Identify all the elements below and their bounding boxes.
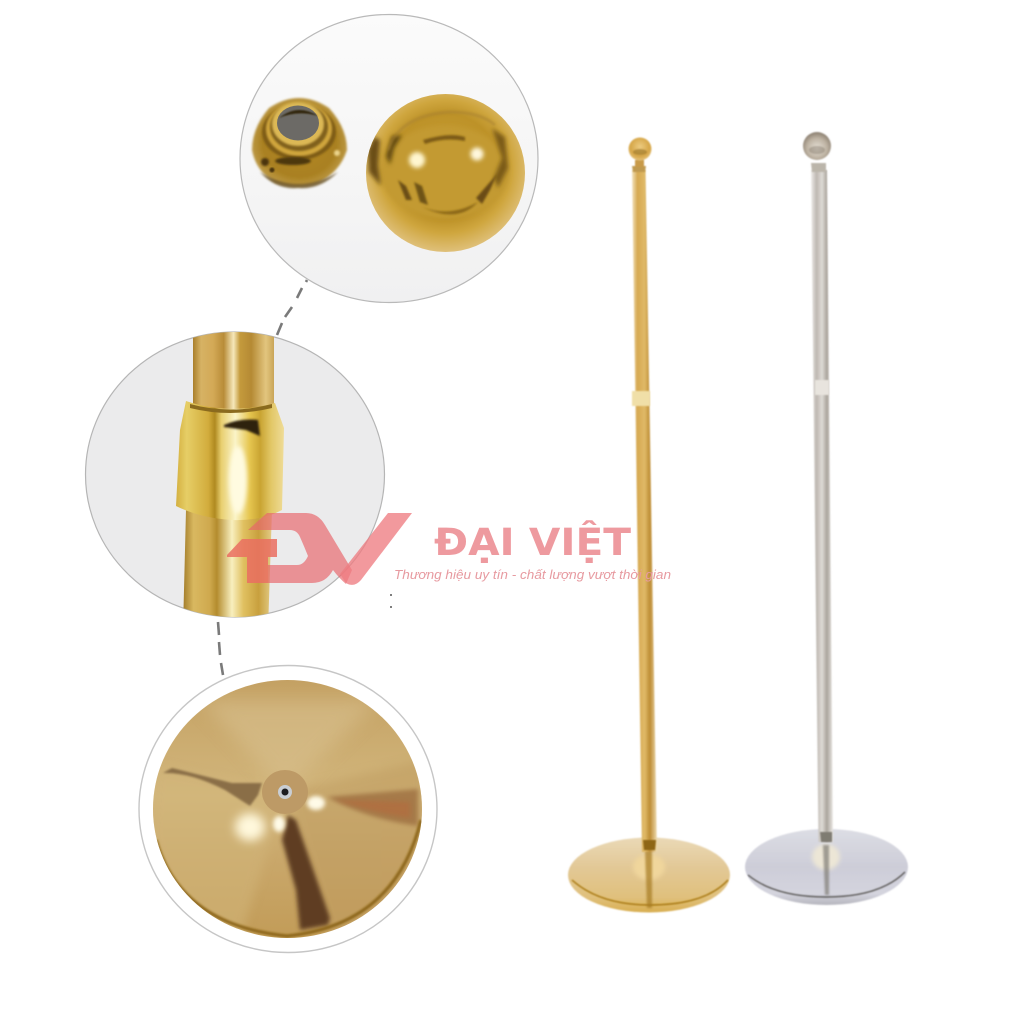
upper tube [193, 325, 274, 410]
product: silver flag pole [745, 132, 908, 905]
silver shaft [811, 170, 833, 842]
gold shaft [632, 170, 657, 852]
icon: polished brass ball [366, 94, 525, 252]
icon: centre hub [262, 770, 308, 814]
silver knob [803, 132, 831, 172]
silver base [745, 829, 908, 905]
lower tube [184, 510, 272, 617]
small specks [390, 594, 392, 608]
tagline: Thương hiệu uy tín - chất lượng vượt thời gian [394, 567, 671, 582]
watermark: Đại Việt logo [227, 513, 671, 585]
panel: ball finial detail circle [240, 14, 538, 302]
connector: dashed line top [277, 280, 307, 335]
gold base [568, 838, 730, 912]
brand name: ĐẠI VIỆT [434, 520, 632, 564]
panel: round base detail circle [139, 666, 437, 952]
product infographic [84, 14, 908, 954]
gold knob [628, 138, 652, 172]
logo mark [227, 513, 412, 585]
panel: telescopic joint detail circle [86, 325, 384, 630]
icon: brass base disc [150, 680, 425, 940]
connector: dashed line bottom [218, 622, 223, 675]
gold collar [632, 391, 650, 406]
icon: threaded brass cap [252, 98, 347, 188]
silver collar [815, 380, 829, 395]
product: gold flag pole [568, 138, 730, 912]
sliding collar [176, 401, 284, 520]
